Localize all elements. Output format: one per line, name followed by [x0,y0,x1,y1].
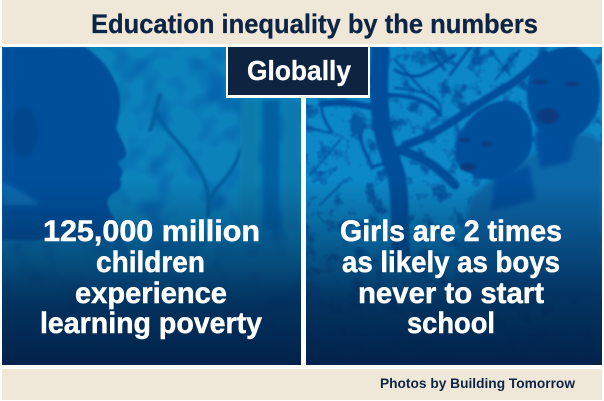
eyes [460,80,579,171]
right statistic: never to start [358,277,544,310]
head silhouette [2,47,126,240]
photo credit: Photos by Building Tomorrow [380,375,575,391]
boy: front face [455,101,533,180]
left statistic: children [96,246,205,279]
boy: rear face [527,47,600,141]
left statistic: experience [75,277,227,310]
right statistic [340,215,562,340]
photo fade [306,190,602,365]
left statistic [40,215,262,340]
title: Education inequality by the numbers [91,9,538,39]
badge: Globally [226,46,370,98]
left statistic: learning poverty [40,307,262,340]
panel: left photo [2,47,301,365]
photo fade [2,191,301,365]
tree [308,47,545,262]
footer band [2,369,602,400]
right statistic: as likely as boys [342,246,560,279]
ear [10,107,38,157]
badge: Globally: Globally [247,55,351,86]
right statistic: Girls are 2 times [340,215,562,248]
right statistic: school [407,307,495,340]
title band [2,0,602,44]
panel: right photo [306,47,602,365]
neck and shirts [458,132,602,280]
shoulder [2,182,42,205]
mouth [537,108,559,124]
left statistic: 125,000 million [43,215,260,248]
